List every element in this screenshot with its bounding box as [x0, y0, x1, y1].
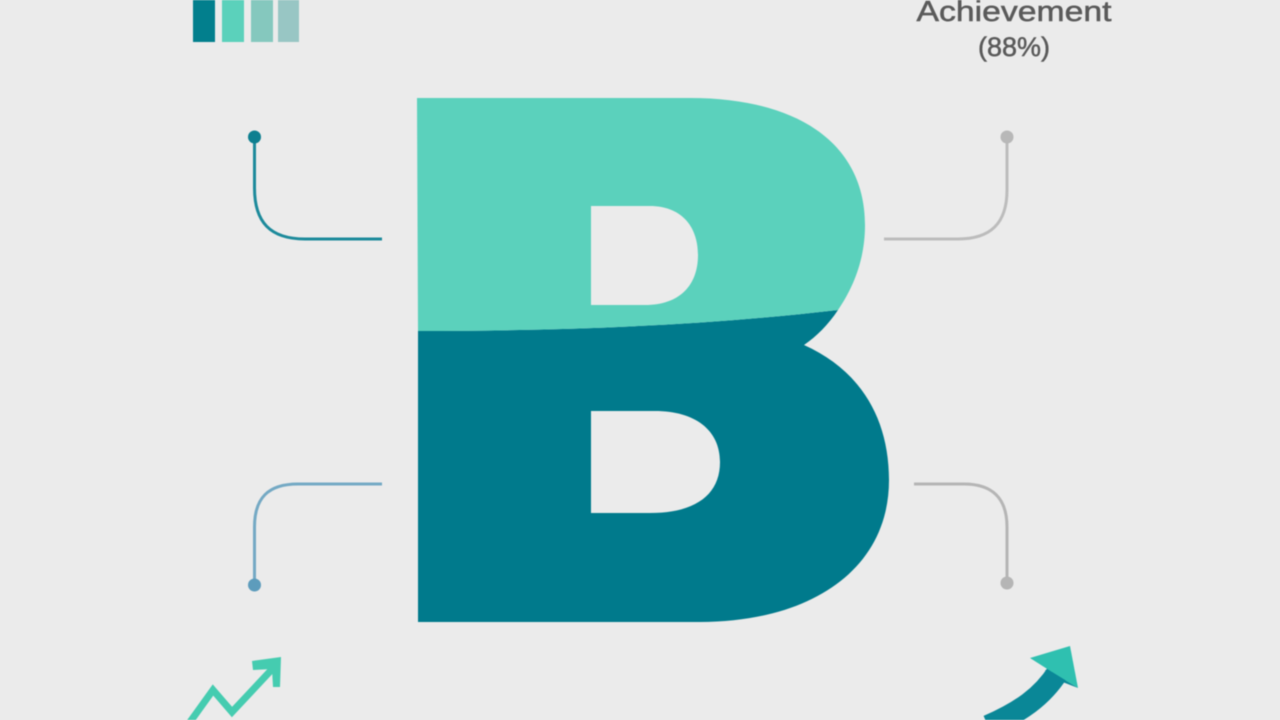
- label: achievement: [916, 0, 1112, 62]
- icon: bar chart: [193, 0, 299, 42]
- B lower half: [418, 310, 889, 622]
- connector: bottom left: [248, 484, 382, 592]
- icon: curved up arrow: [988, 646, 1078, 720]
- connector: bottom right: [914, 484, 1014, 590]
- letter B: [417, 98, 889, 622]
- label: achievement: (88%): [978, 32, 1050, 62]
- icon: zigzag growth arrow: [190, 657, 281, 720]
- connector: top left: [248, 130, 382, 239]
- B upper half: [417, 98, 865, 331]
- connector: top right: [884, 130, 1014, 239]
